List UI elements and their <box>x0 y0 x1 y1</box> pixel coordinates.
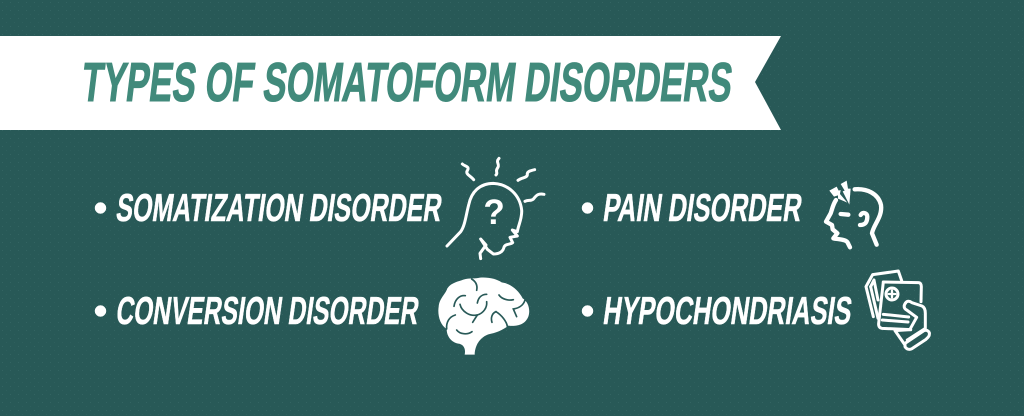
list item: pain disorder <box>582 187 805 230</box>
title banner <box>0 36 781 130</box>
list item: somatization disorder <box>95 187 445 230</box>
list item: conversion disorder <box>95 290 422 333</box>
icon: head with question mark <box>447 158 544 259</box>
question mark: ? <box>483 193 505 232</box>
list item: conversion disorder: CONVERSION DISORDER <box>114 290 422 333</box>
icon: medical card in hand <box>866 271 929 349</box>
icon: head with pain bolt <box>826 181 881 247</box>
list item: somatization disorder: SOMATIZATION DISORDER <box>114 187 445 230</box>
icon: brain <box>438 278 529 355</box>
pain bolts <box>829 181 851 205</box>
list item: hypochondriasis: HYPOCHONDRIASIS <box>601 290 855 333</box>
list item: hypochondriasis <box>582 290 855 333</box>
list item: pain disorder: PAIN DISORDER <box>601 187 805 230</box>
